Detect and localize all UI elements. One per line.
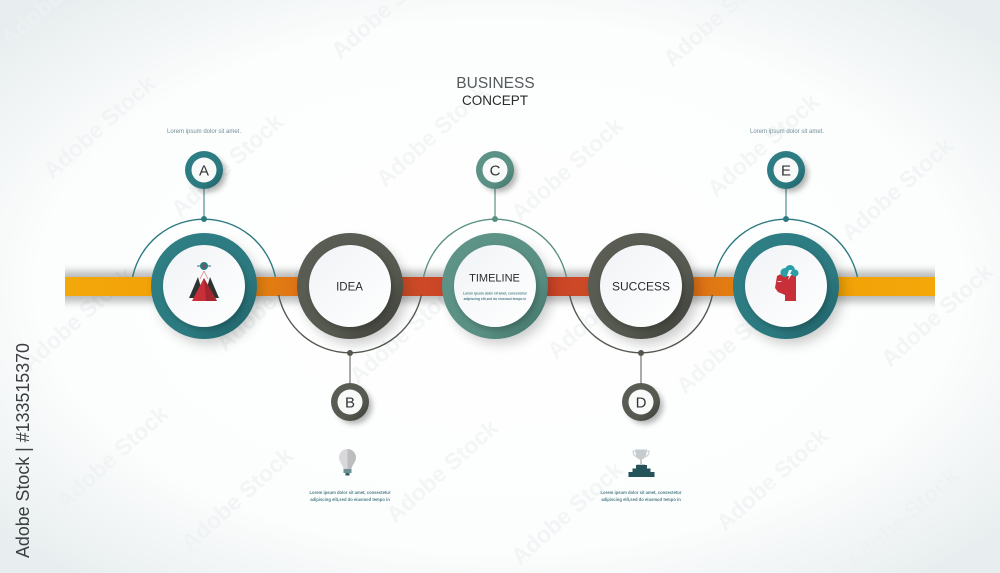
node A	[151, 151, 261, 344]
node C: adipiscing elit,sed do eiusmod tempo in	[464, 297, 526, 301]
icon: head with cloud	[775, 265, 798, 301]
infographic: Adobe Stock	[38, 70, 160, 184]
title: CONCEPT	[462, 93, 528, 108]
infographic: Adobe Stock	[211, 242, 333, 356]
infographic: Adobe Stock	[542, 250, 664, 364]
infographic: Adobe Stock	[506, 456, 628, 570]
node D	[588, 233, 698, 424]
badge B: B	[345, 394, 355, 412]
infographic: Adobe Stock	[836, 132, 958, 246]
badge A	[185, 151, 223, 189]
text: B description: adipiscing elit,sed do eiusmod tempo in	[310, 497, 390, 502]
text: D description: adipiscing elit,sed do eiusmod tempo in	[601, 497, 681, 502]
node E	[733, 151, 843, 344]
infographic: Adobe Stock	[16, 262, 138, 376]
stock id: Adobe Stock | #133515370	[12, 343, 33, 558]
infographic: Adobe Stock	[344, 275, 466, 389]
badge E	[767, 151, 805, 189]
infographic: Adobe Stock	[176, 442, 298, 556]
infographic: Adobe Stock	[166, 108, 288, 222]
badge C: C	[490, 162, 501, 180]
node C	[442, 151, 552, 344]
text: D description: Lorem ipsum dolor sit amet, consectetur	[601, 490, 682, 495]
badge C	[476, 151, 514, 189]
infographic: Adobe Stock	[671, 285, 793, 399]
title: BUSINESS	[456, 75, 535, 92]
infographic: Adobe Stock	[51, 400, 173, 514]
node C: Lorem ipsum dolor sit amet, consectetur	[463, 292, 528, 296]
infographic: Adobe Stock	[702, 88, 824, 202]
badge D: D	[636, 394, 647, 412]
timeline bar	[50, 271, 950, 302]
infographic: Adobe Stock	[371, 78, 493, 192]
infographic: Adobe Stock	[381, 414, 503, 528]
text: B description: Lorem ipsum dolor sit amet, consectetur	[310, 490, 391, 495]
icon: light bulb	[339, 449, 356, 476]
text: B description	[310, 490, 391, 502]
infographic: Adobe Stock	[841, 462, 963, 573]
node B	[297, 233, 407, 424]
infographic: Adobe Stock	[876, 258, 998, 372]
connector arcs	[133, 219, 857, 353]
caption: E: Lorem ipsum dolor sit amet.	[750, 129, 824, 135]
node D: SUCCESS	[612, 280, 670, 294]
node C: TIMELINE	[469, 272, 520, 284]
infographic: Adobe Stock	[711, 422, 833, 536]
badge E: E	[781, 162, 791, 180]
badge A: A	[199, 162, 209, 180]
title	[456, 75, 535, 108]
infographic: Adobe Stock	[506, 112, 628, 226]
node B: IDEA	[336, 282, 363, 294]
badge D	[622, 383, 660, 421]
badge B	[331, 383, 369, 421]
caption: A: Lorem ipsum dolor sit amet.	[167, 129, 241, 135]
icon: mountains	[189, 262, 219, 301]
text: D description	[601, 490, 682, 502]
icon: trophy on podium	[628, 450, 654, 477]
